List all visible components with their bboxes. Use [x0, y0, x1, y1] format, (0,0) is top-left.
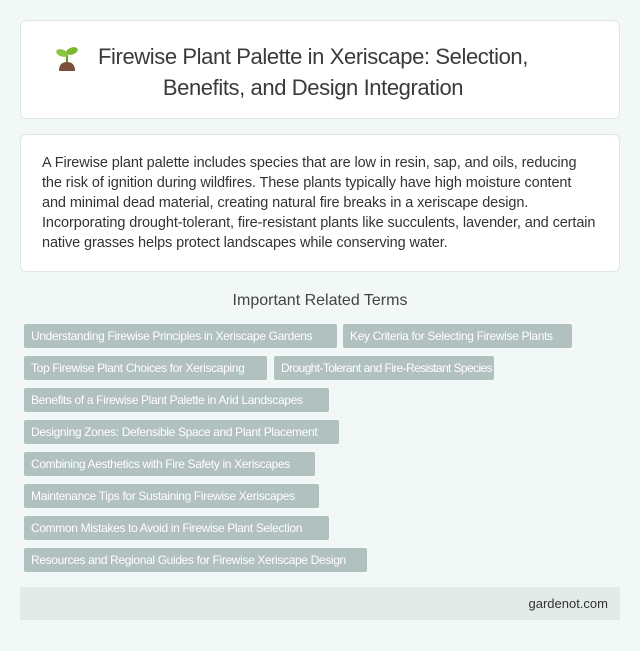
tag — [24, 452, 315, 476]
tag — [24, 356, 267, 380]
tag: Resources and Regional Guides for Firewise Xeriscape Design — [31, 553, 346, 567]
heading: related terms: Important Related Terms — [233, 292, 407, 309]
footer — [20, 587, 620, 620]
description text: and minimal dead material, creating natural fire breaks in a xeriscape design. — [42, 195, 528, 211]
header card — [20, 20, 620, 119]
tag — [24, 548, 367, 572]
tag — [274, 356, 494, 380]
tag: Maintenance Tips for Sustaining Firewise Xeriscapes — [31, 489, 295, 503]
tag: Drought-Tolerant and Fire-Resistant Species — [281, 361, 492, 375]
tag — [24, 516, 329, 540]
title: Firewise Plant Palette in Xeriscape: Selection, Benefits, and Design Integration — [98, 44, 528, 100]
description text: native grasses helps protect landscapes while conserving water. — [42, 235, 448, 251]
tag: Key Criteria for Selecting Firewise Plants — [350, 329, 553, 343]
tag: Common Mistakes to Avoid in Firewise Plant Selection — [31, 521, 302, 535]
tag: Understanding Firewise Principles in Xeriscape Gardens — [31, 329, 312, 343]
description text: the risk of ignition during wildfires. These plants typically have high moisture content — [42, 175, 571, 191]
tag — [24, 420, 339, 444]
tag: Benefits of a Firewise Plant Palette in Arid Landscapes — [31, 393, 303, 407]
description card — [20, 134, 620, 272]
description text: Incorporating drought-tolerant, fire-resistant plants like succulents, lavender, and certain — [42, 215, 595, 231]
footer text: gardenot.com — [528, 596, 608, 611]
tag: Top Firewise Plant Choices for Xeriscaping — [31, 361, 244, 375]
tag — [343, 324, 572, 348]
tag — [24, 484, 319, 508]
tag — [24, 324, 337, 348]
description text — [42, 155, 595, 251]
tag: Designing Zones: Defensible Space and Plant Placement — [31, 425, 317, 439]
tag: Combining Aesthetics with Fire Safety in Xeriscapes — [31, 457, 290, 471]
icon: seedling — [56, 47, 78, 71]
description text: A Firewise plant palette includes species that are low in resin, sap, and oils, reducing — [42, 155, 576, 171]
tag — [24, 388, 329, 412]
